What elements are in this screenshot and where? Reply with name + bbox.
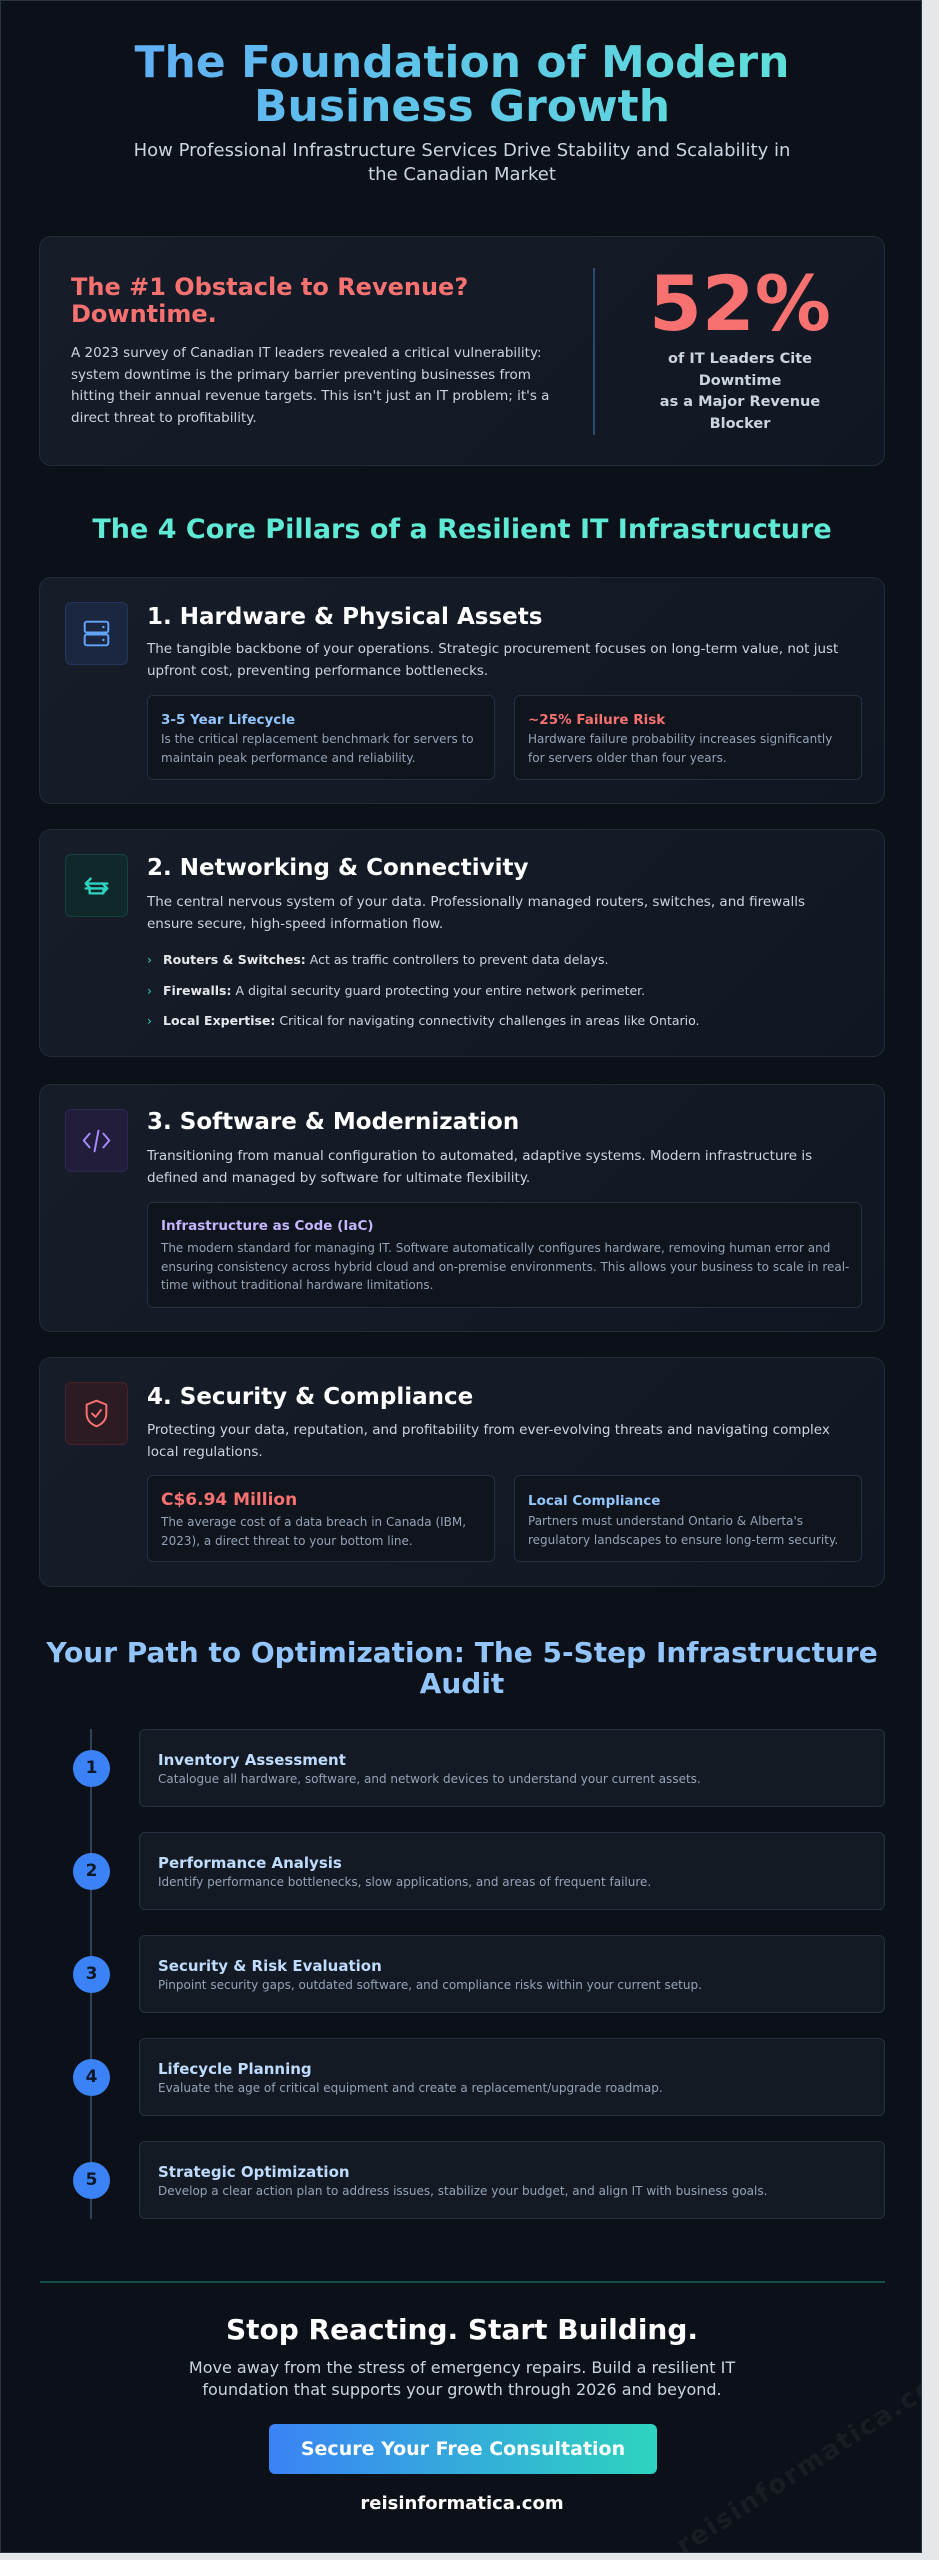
step 5 xyxy=(73,2141,885,2219)
subtitle: How Professional Infrastructure Services Drive Stability and Scalability in the Canadian Market xyxy=(134,140,790,185)
text: survey: A 2023 survey of Canadian IT leaders revealed a critical vulnerability: system downtime is the primary barrier preventing businesses from hitting their annual revenue targets. This isn't just an IT problem; it's a direct threat to profitability. xyxy=(71,345,549,426)
step 4: Evaluate the age of critical equipment and create a replacement/upgrade roadmap. xyxy=(158,2081,663,2095)
step 2: 2 xyxy=(86,1861,97,1881)
step 5: Strategic Optimization xyxy=(158,2163,350,2181)
title: 3. Software & Modernization xyxy=(147,1109,519,1135)
stat label: of IT Leaders Cite Downtime xyxy=(668,351,812,388)
timeline xyxy=(73,1729,885,2219)
box: local compliance: Local Compliance xyxy=(528,1493,660,1509)
title: 1. Hardware & Physical Assets xyxy=(147,604,542,630)
box: failure risk: ~25% Failure Risk xyxy=(528,712,665,728)
box: failure risk xyxy=(514,695,862,780)
step 3: 3 xyxy=(86,1964,97,1984)
box: breach cost: The average cost of a data breach in Canada (IBM, 2023), a direct threat to your bottom line. xyxy=(161,1515,466,1548)
step 2: Performance Analysis xyxy=(158,1854,342,1872)
box: local compliance xyxy=(514,1475,862,1562)
CTA heading: Stop Reacting. Start Building. xyxy=(226,2313,698,2346)
box: breach cost xyxy=(147,1475,495,1562)
step 2 xyxy=(73,1832,885,1910)
box: breach cost: C$6.94 Million xyxy=(161,1490,297,1510)
step 3: Security & Risk Evaluation xyxy=(158,1957,382,1975)
stat label: as a Major Revenue Blocker xyxy=(660,394,820,432)
bullet list: › xyxy=(147,983,152,998)
panel: networking xyxy=(39,829,885,1057)
bullet list: › xyxy=(147,952,152,967)
title: 2. Networking & Connectivity xyxy=(147,855,528,881)
button xyxy=(269,2424,657,2474)
panel: downtime stat xyxy=(39,236,885,466)
stat: 52%: 52% xyxy=(649,259,831,348)
button: Secure Your Free Consultation xyxy=(301,2438,625,2460)
text: Transitioning from manual configuration to automated, adaptive systems. Modern infrastructure is defined and managed by software for ultimate flexibility. xyxy=(147,1148,812,1186)
step 1: Catalogue all hardware, software, and network devices to understand your current assets. xyxy=(158,1772,701,1786)
box: local compliance: Partners must understand Ontario & Alberta's regulatory landscapes to ensure long-term security. xyxy=(528,1514,838,1546)
title: 4. Security & Compliance xyxy=(147,1384,473,1410)
icon: server xyxy=(65,602,128,665)
panel: software xyxy=(39,1084,885,1332)
step 4: 4 xyxy=(86,2067,97,2087)
step 3 xyxy=(73,1935,885,2013)
text: The central nervous system of your data. Professionally managed routers, switches, and firewalls ensure secure, high-speed information flow. xyxy=(147,894,805,932)
panel: hardware xyxy=(39,577,885,804)
icon: code brackets xyxy=(65,1109,128,1172)
bullet list: › xyxy=(147,1013,152,1028)
title: Business Growth xyxy=(254,81,670,132)
box: IaC: The modern standard for managing IT. Software automatically configures hardware, removing human error and ensuring consistency across hybrid cloud and on-premise environments. This allows your business to scale in real-time without traditional hardware limitations. xyxy=(161,1241,849,1292)
box: lifecycle: 3-5 Year Lifecycle xyxy=(161,712,295,728)
step 5: 5 xyxy=(86,2170,97,2190)
step 2: Identify performance bottlenecks, slow applications, and areas of frequent failure. xyxy=(158,1875,651,1889)
heading: 4 pillars: The 4 Core Pillars of a Resilient IT Infrastructure xyxy=(92,514,832,545)
CTA text: Move away from the stress of emergency repairs. Build a resilient IT foundation that supports your growth through 2026 and beyond. xyxy=(189,2358,735,2399)
bullet list: Routers & Switches: Act as traffic controllers to prevent data delays. xyxy=(163,952,608,967)
step 1: 1 xyxy=(86,1758,97,1778)
box: lifecycle xyxy=(147,695,495,780)
box: IaC: Infrastructure as Code (IaC) xyxy=(161,1218,374,1234)
icon: network xyxy=(65,854,128,917)
bullet list: Firewalls: A digital security guard protecting your entire network perimeter. xyxy=(163,983,645,998)
icon: shield xyxy=(65,1382,128,1445)
step 5: Develop a clear action plan to address issues, stabilize your budget, and align IT with business goals. xyxy=(158,2184,767,2198)
box: failure risk: Hardware failure probability increases significantly for servers older than four years. xyxy=(528,732,832,764)
title: The Foundation of Modern xyxy=(135,37,789,88)
step 3: Pinpoint security gaps, outdated software, and compliance risks within your current setup. xyxy=(158,1978,702,1992)
step 4 xyxy=(73,2038,885,2116)
box: lifecycle: Is the critical replacement benchmark for servers to maintain peak performance and reliability. xyxy=(161,732,474,764)
bullet list xyxy=(147,952,700,1028)
heading: obstacle: The #1 Obstacle to Revenue? Downtime. xyxy=(71,273,468,328)
heading: 5-step audit: Your Path to Optimization: The 5-Step Infrastructure Audit xyxy=(46,1636,878,1700)
step 4: Lifecycle Planning xyxy=(158,2060,312,2078)
box: IaC xyxy=(147,1202,862,1308)
step 1 xyxy=(73,1729,885,1807)
text: Protecting your data, reputation, and profitability from ever-evolving threats and navigating complex local regulations. xyxy=(147,1422,830,1460)
text: The tangible backbone of your operations. Strategic procurement focuses on long-term value, not just upfront cost, preventing performance bottlenecks. xyxy=(147,641,838,678)
bullet list: Local Expertise: Critical for navigating connectivity challenges in areas like Ontario. xyxy=(163,1013,700,1028)
stat label xyxy=(660,351,820,432)
panel: security xyxy=(39,1357,885,1587)
step 1: Inventory Assessment xyxy=(158,1751,346,1769)
website: reisinformatica.com xyxy=(360,2493,564,2514)
title xyxy=(1,41,923,129)
